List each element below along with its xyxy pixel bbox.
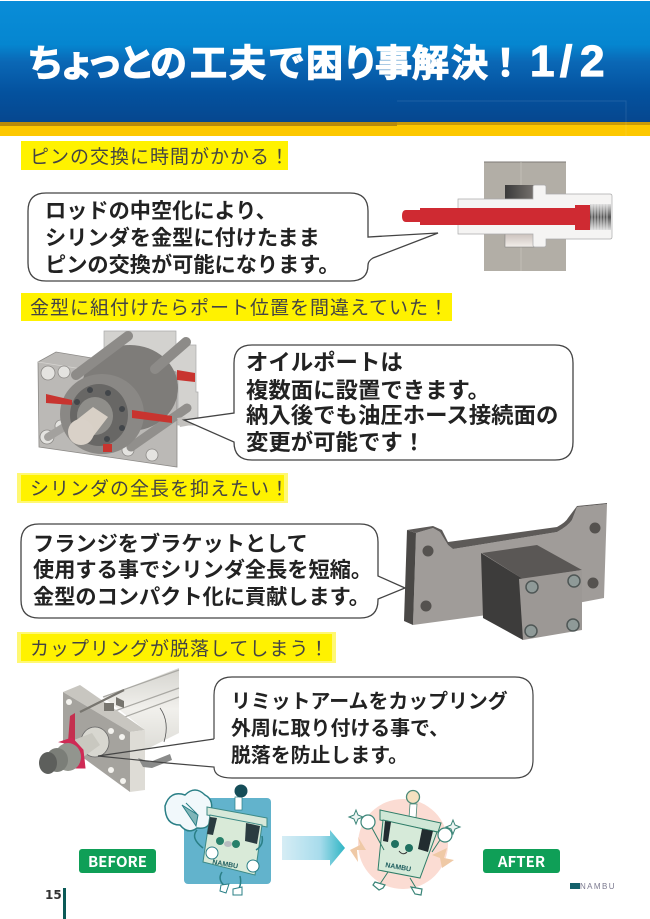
callout: hollow rod: ロッドの中空化により、 <box>45 199 277 223</box>
diagram: flange bracket <box>404 503 607 640</box>
badge: after <box>483 849 560 873</box>
label: port position: 金型に組付けたらポート位置を間違えていた！ <box>30 297 449 319</box>
diagram: transparent cylinder with oil ports <box>38 331 198 467</box>
callout: limit arm: 外周に取り付ける事で、 <box>231 717 449 740</box>
character: after: NAMBU <box>385 862 412 873</box>
callout: oil port: 納入後でも油圧ホース接続面の <box>246 403 558 428</box>
label: overall length <box>17 473 290 503</box>
header banner <box>0 1 650 136</box>
diagram: hollow rod cross-section <box>402 162 612 271</box>
callout: bracket flange: 金型のコンパクト化に貢献します。 <box>33 585 370 609</box>
label: pin replacement: ピンの交換に時間がかかる！ <box>30 146 290 168</box>
diagram: cylinder with limit arm <box>39 668 179 792</box>
character: after <box>349 790 460 895</box>
title: ちょっとの工夫で困り事解決！ <box>27 43 524 84</box>
badge: before: BEFORE <box>88 851 147 872</box>
callout: bracket flange: 使用する事でシリンダ全長を短縮。 <box>33 557 372 582</box>
callout: limit arm <box>98 677 533 778</box>
page number <box>45 888 66 919</box>
callout: hollow rod: ピンの交換が可能になります。 <box>45 252 340 277</box>
callout: hollow rod: シリンダを金型に付けたまま <box>45 225 320 250</box>
badge: after: AFTER <box>497 851 545 872</box>
label: pin replacement <box>21 141 290 170</box>
callout: hollow rod <box>28 193 438 281</box>
callout: bracket flange: フランジをブラケットとして <box>33 531 308 556</box>
badge: before <box>79 849 156 873</box>
character: before: NAMBU <box>212 859 239 870</box>
label: coupling falls off: カップリングが脱落してしまう！ <box>30 638 329 660</box>
label: coupling falls off <box>17 632 336 663</box>
callout: oil port: オイルポートは <box>246 350 403 375</box>
label: overall length: シリンダの全長を抑えたい！ <box>30 478 290 500</box>
page number: 15 <box>45 888 62 902</box>
callout: limit arm: リミットアームをカップリング <box>231 689 508 713</box>
callout: oil port: 複数面に設置できます。 <box>246 378 490 403</box>
arrow: before to after <box>282 830 345 866</box>
callout: bracket flange <box>21 524 405 618</box>
character: before <box>165 784 271 895</box>
callout: oil port: 変更が可能です！ <box>246 429 425 455</box>
logo: NAMBU: NAMBU <box>580 882 616 891</box>
callout: oil port <box>184 345 573 460</box>
callout: limit arm: 脱落を防止します。 <box>231 744 408 767</box>
title: 1/2 <box>530 37 604 86</box>
